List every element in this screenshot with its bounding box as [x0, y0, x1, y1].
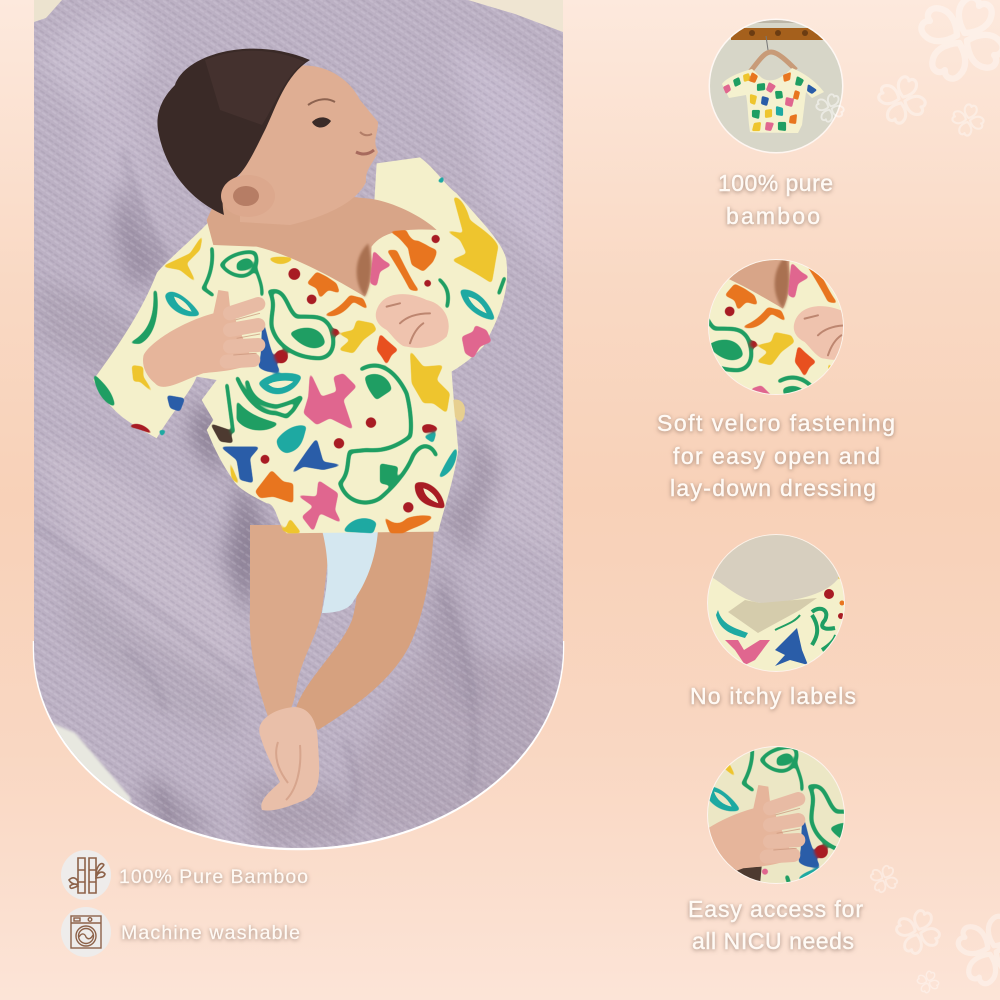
caption: no itchy labels: No itchy labels [690, 683, 856, 709]
caption: easy access: all NICU needs [692, 928, 854, 954]
hanger [750, 52, 796, 72]
photo: baby on lavender blanket [30, 0, 570, 860]
caption: easy access [688, 896, 863, 954]
wooden peg rail [731, 28, 826, 40]
onesie and arms [93, 157, 507, 533]
mini kimono [722, 68, 824, 133]
caption: 100% pure bamboo [718, 170, 833, 229]
caption: soft velcro fastening [657, 410, 895, 501]
right hand [376, 294, 449, 348]
baby figure [93, 49, 507, 811]
photo arch outline [34, 641, 563, 849]
caption: 100% pure bamboo: bamboo [726, 203, 820, 229]
feature circle: velcro fastening close-up [708, 259, 844, 395]
caption: soft velcro fastening: for easy open and [673, 443, 880, 469]
text: Machine washable: Machine washable [121, 922, 300, 944]
decorative clovers top right [872, 0, 1000, 139]
feature circle: no itchy labels close-up [707, 534, 845, 672]
icon: washing machine [61, 907, 111, 957]
caption: soft velcro fastening: Soft velcro fastening [657, 410, 895, 436]
caption: 100% pure bamboo: 100% pure [718, 170, 833, 196]
fabric motifs [93, 175, 505, 533]
text: 100% Pure Bamboo: 100% Pure Bamboo [119, 866, 308, 888]
onesie body [93, 157, 507, 533]
caption: easy access: Easy access for [688, 896, 863, 922]
chest and neck [207, 183, 437, 297]
decorative clovers bottom right [866, 861, 1000, 996]
icon: bamboo [61, 850, 111, 900]
inner neck fabric [713, 535, 839, 603]
feature circle: garment on hanger [708, 18, 844, 154]
cut-outs inside leaf motifs [174, 297, 487, 503]
label tab [453, 400, 465, 422]
feature circle: easy access close-up [707, 746, 845, 884]
legs [250, 525, 434, 811]
blanket [30, 0, 570, 860]
head [157, 49, 378, 225]
caption: soft velcro fastening: lay-down dressing [670, 475, 876, 501]
diaper [322, 530, 378, 613]
left arm and hand [143, 290, 260, 387]
